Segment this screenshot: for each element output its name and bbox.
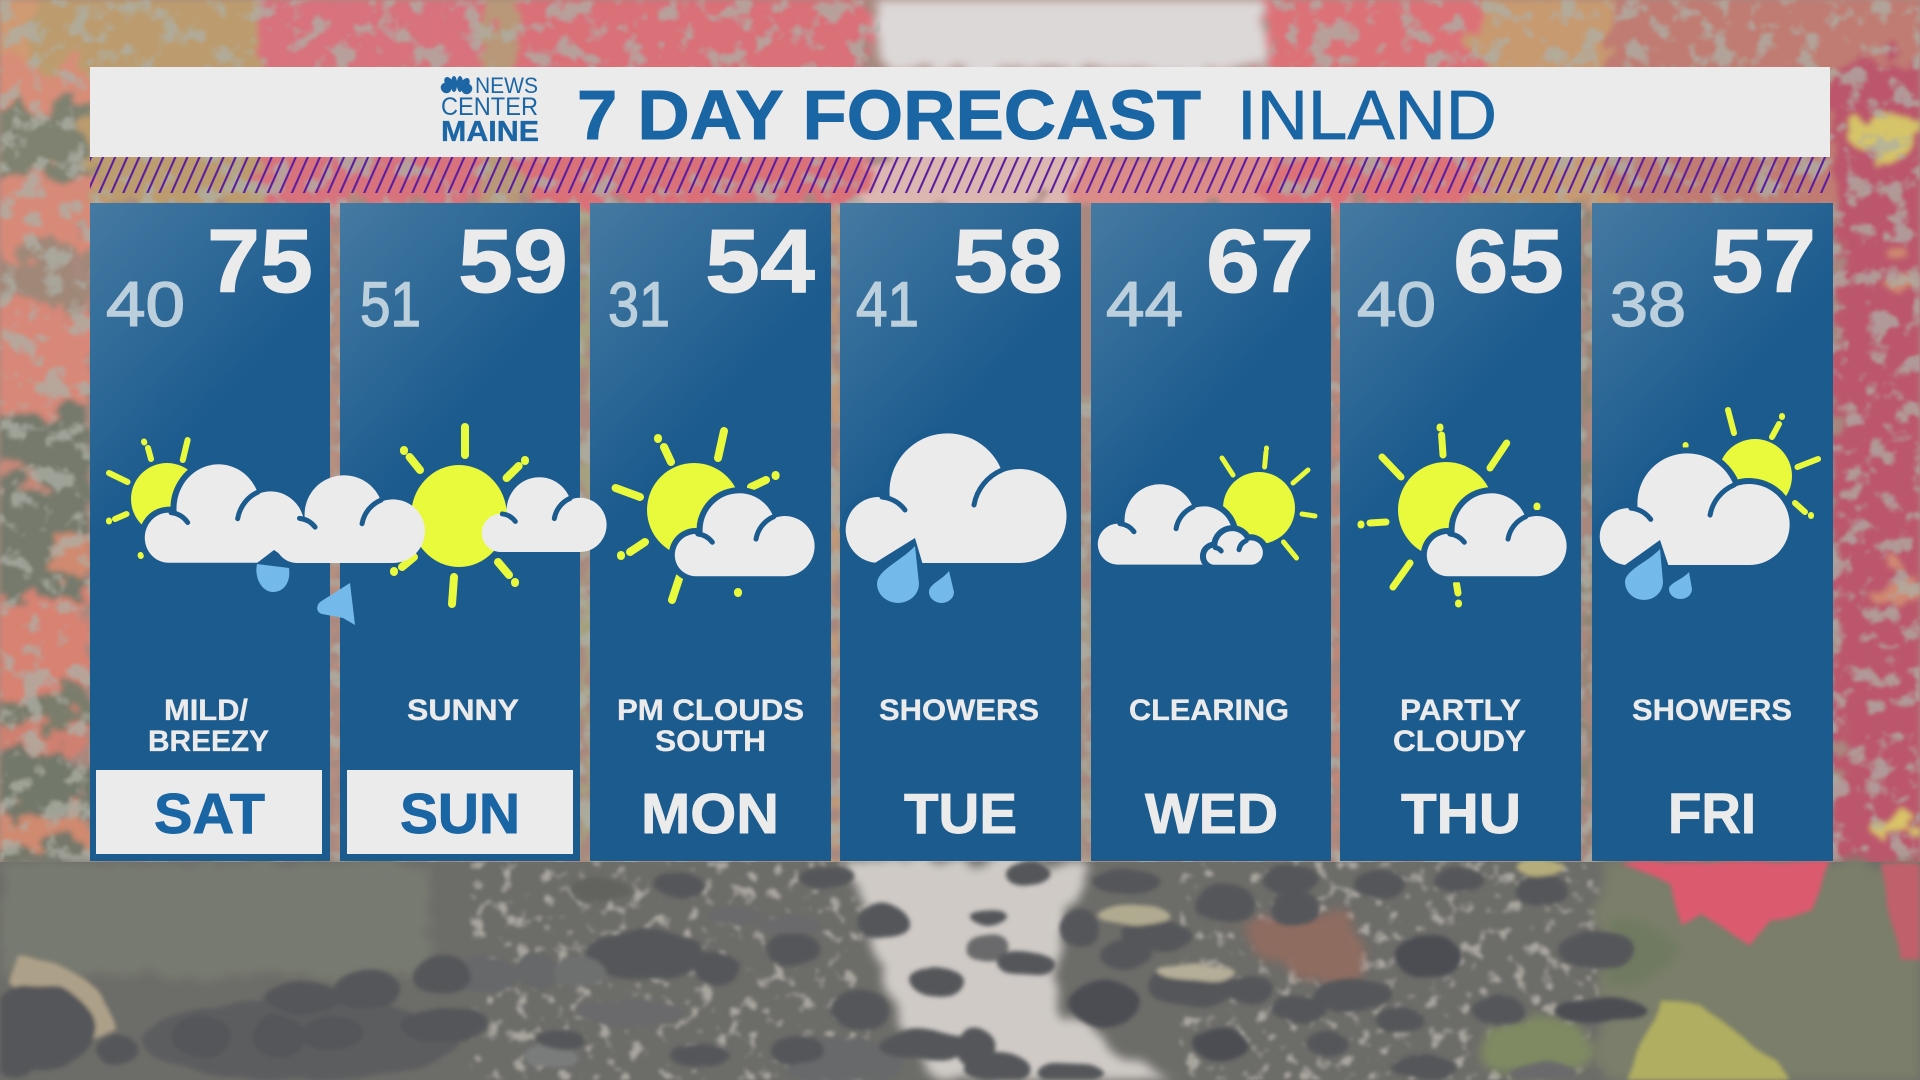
icon: Sunday sun and clouds bbox=[275, 427, 607, 625]
low temp: 40 bbox=[1357, 270, 1436, 340]
header bar bbox=[90, 67, 1830, 157]
day label: WED bbox=[1145, 782, 1278, 846]
icon: Friday sun, cloud and rain bbox=[1600, 410, 1818, 600]
day label box: SUN bbox=[400, 782, 520, 846]
day label: FRI bbox=[1668, 782, 1756, 846]
icon: Tuesday cloud and rain bbox=[846, 433, 1067, 603]
day label: MON bbox=[641, 782, 779, 846]
condition: SUNNY bbox=[407, 694, 519, 727]
condition bbox=[148, 694, 269, 758]
condition: CLEARING bbox=[1129, 694, 1289, 727]
high temp: 57 bbox=[1711, 212, 1816, 312]
panel: Saturday bbox=[90, 203, 330, 861]
icon: peacock bbox=[439, 75, 474, 96]
panel: Sunday bbox=[340, 203, 580, 861]
high temp: 75 bbox=[207, 212, 313, 312]
condition: PARTLY bbox=[1400, 694, 1521, 727]
station logo: NEWS CENTER MAINE bbox=[439, 73, 539, 148]
low temp: 31 bbox=[608, 270, 670, 340]
condition: SHOWERS bbox=[1632, 694, 1792, 727]
panel: Wednesday bbox=[1091, 203, 1331, 861]
panel: Thursday bbox=[1340, 203, 1581, 861]
day label box bbox=[96, 770, 322, 854]
icon: Monday sun and cloud bbox=[616, 431, 815, 600]
condition: BREEZY bbox=[148, 725, 269, 758]
condition: MILD/ bbox=[164, 694, 249, 727]
condition bbox=[1393, 694, 1526, 758]
condition: SOUTH bbox=[655, 725, 766, 758]
low temp: 41 bbox=[856, 270, 919, 340]
title: 7 DAY FORECAST bbox=[577, 76, 1201, 154]
day label box bbox=[347, 770, 573, 854]
panel: Friday bbox=[1592, 203, 1833, 861]
low temp: 51 bbox=[360, 270, 421, 340]
day label box: SAT bbox=[154, 782, 265, 846]
condition: CLOUDY bbox=[1393, 725, 1526, 758]
low temp: 44 bbox=[1106, 270, 1183, 340]
icon: Thursday sun and cloud bbox=[1361, 427, 1567, 604]
high temp: 65 bbox=[1453, 212, 1564, 312]
low temp: 38 bbox=[1610, 270, 1686, 340]
low temp: 40 bbox=[106, 270, 185, 340]
day label: THU bbox=[1401, 782, 1521, 846]
foliage gaps between panels and side columns bbox=[330, 203, 340, 863]
condition bbox=[617, 694, 804, 758]
panel: Monday bbox=[590, 203, 831, 861]
panel: Tuesday bbox=[840, 203, 1081, 861]
ground and river bbox=[0, 862, 1920, 1080]
icon: Saturday sun, cloud and rain bbox=[109, 440, 305, 592]
station logo: NEWS CENTER MAINE: MAINE bbox=[441, 116, 539, 148]
station logo: NEWS CENTER MAINE: NEWS bbox=[475, 73, 538, 98]
icon: Wednesday sun and clouds bbox=[1098, 448, 1315, 565]
high temp: 59 bbox=[458, 212, 568, 312]
day label: TUE bbox=[904, 782, 1017, 846]
condition: PM CLOUDS bbox=[617, 694, 804, 727]
high temp: 54 bbox=[705, 212, 815, 312]
high temp: 58 bbox=[953, 212, 1063, 312]
condition: SHOWERS bbox=[879, 694, 1039, 727]
river rocks bbox=[0, 859, 1645, 1080]
subtitle: region: INLAND bbox=[1237, 76, 1497, 154]
station logo: NEWS CENTER MAINE: CENTER bbox=[441, 93, 538, 121]
high temp: 67 bbox=[1206, 212, 1314, 312]
hatched band bbox=[90, 157, 1830, 193]
